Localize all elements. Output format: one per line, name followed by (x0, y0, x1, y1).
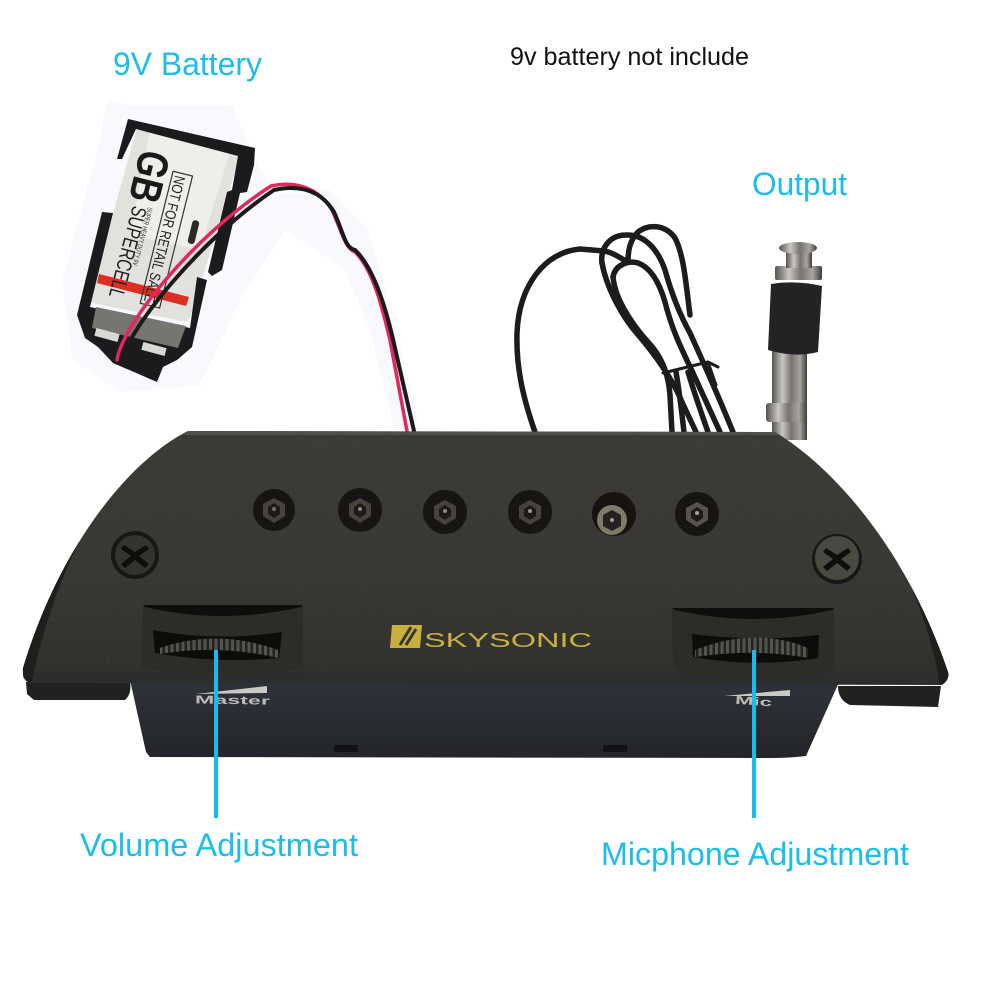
battery photo halo (62, 100, 420, 430)
jack black sleeve (768, 282, 822, 355)
note: battery not included: 9v battery not include (510, 43, 749, 71)
output cable (517, 227, 733, 432)
cable tie (663, 362, 718, 385)
brand logo (390, 625, 592, 652)
jack threaded barrel (772, 350, 807, 440)
screw: left mounting (111, 531, 159, 579)
callout: Volume Adjustment: Volume Adjustment (80, 827, 358, 863)
battery body (90, 126, 238, 322)
slider: master (141, 605, 303, 677)
battery wires (117, 184, 414, 431)
slider: mic (672, 608, 835, 680)
battery small print: SUPER HEAVY DUTY 9V (130, 206, 153, 266)
plate rim shading (22, 540, 948, 684)
battery terminals (92, 307, 186, 348)
label: master (195, 686, 271, 708)
battery notice (139, 171, 192, 308)
label: mic: Mic (735, 695, 774, 709)
title: 9V Battery: 9V Battery (113, 46, 262, 82)
callout: Micphone Adjustment: Micphone Adjustment (601, 836, 909, 872)
icon: 9V battery in holder (77, 119, 255, 382)
right foot (838, 686, 941, 707)
adjustment screws row (253, 488, 719, 536)
lower box (130, 680, 840, 758)
title: Output: Output (752, 166, 847, 202)
label: master: Master (195, 694, 271, 708)
left foot (26, 682, 130, 700)
label: mic (724, 690, 790, 709)
jack washer (775, 266, 822, 280)
battery label SUPERCELL: SUPERCELL (104, 204, 150, 300)
screw: right mounting (812, 534, 862, 584)
top plate (23, 431, 948, 684)
output jack connector (766, 242, 822, 440)
battery red stripe (97, 274, 189, 306)
battery notice: NOT FOR RETAIL SALE (140, 174, 188, 304)
jack knurled ring (766, 403, 807, 422)
jack tip (779, 242, 817, 254)
battery brand GB: GB (119, 146, 179, 208)
brand name: SKYSONIC (424, 630, 592, 652)
pickup unit (0, 431, 1000, 758)
pointer line: volume (214, 650, 218, 818)
pointer line: microphone (752, 650, 756, 818)
battery label tag (187, 220, 200, 245)
battery holder frame (117, 119, 255, 276)
